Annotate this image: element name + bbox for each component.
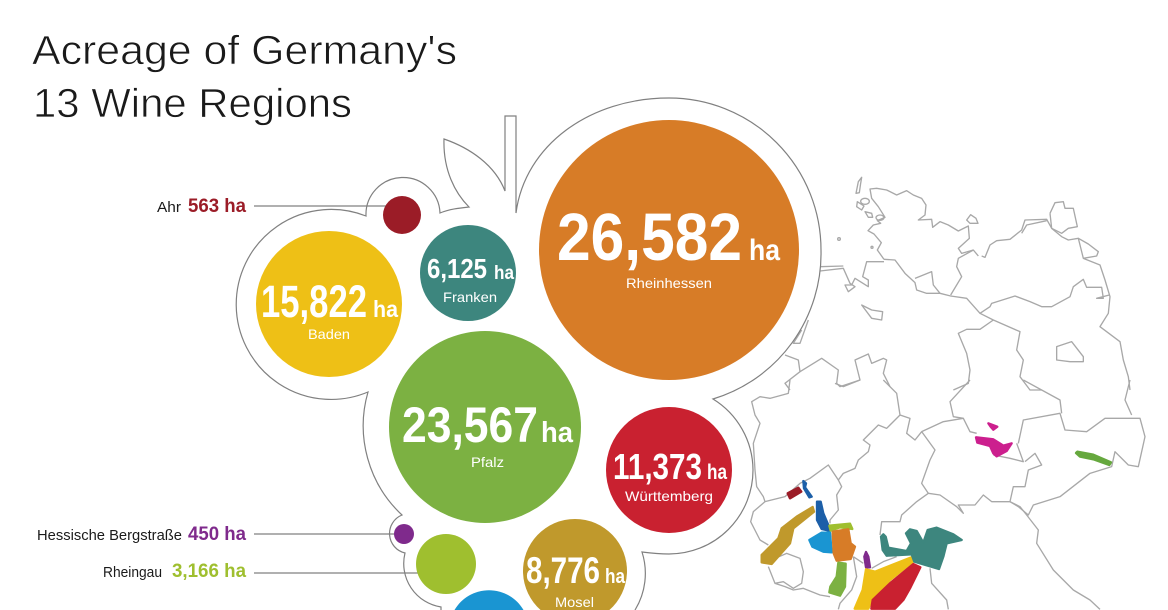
bubble: Rheinhessen: 26,582 — [557, 200, 742, 275]
bubble: Mosel: 8,776 — [526, 550, 600, 591]
map region: Rheingau — [829, 524, 852, 531]
bubble: Rheinhessen — [539, 120, 799, 380]
bubble: Wuerttemberg: 11,373 — [613, 446, 702, 487]
bubble: Mosel: Mosel — [555, 594, 594, 610]
bubble: Pfalz: Pfalz — [471, 454, 504, 470]
bubble: Mosel — [523, 519, 627, 610]
bubble: Wuerttemberg: ha — [707, 461, 727, 484]
callout: Ahr: 563 ha — [188, 196, 246, 217]
map region: Sachsen — [1076, 452, 1111, 465]
callout: Ahr — [157, 196, 390, 217]
callout: Hessische Bergstrasse: Hessische Bergstraße — [37, 527, 182, 544]
bubble: Wuerttemberg — [606, 407, 732, 533]
bubble: Nahe — [454, 590, 524, 610]
map region: Ahr — [788, 488, 801, 498]
bubble: Pfalz — [389, 331, 581, 523]
bubble: Baden — [256, 231, 402, 377]
bubble: Franken — [420, 225, 516, 321]
callout: Rheingau — [103, 561, 420, 582]
map: Germany state borders south — [751, 380, 1145, 609]
map region: Saale-Unstrut — [976, 423, 1012, 456]
title: Acreage of Germany's — [32, 27, 457, 73]
callout: Hessische Bergstrasse: 450 ha — [188, 524, 246, 545]
callout: Rheingau: Rheingau — [103, 564, 162, 581]
bubble: Franken: ha — [494, 263, 514, 284]
bubble: Rheinhessen: ha — [749, 234, 780, 267]
map region: Baden — [855, 557, 913, 609]
map region: Franken — [881, 528, 962, 569]
map region: Mosel — [762, 507, 814, 564]
bubble: Rheingau — [416, 534, 476, 594]
map region: Pfalz — [829, 563, 846, 596]
map region: Rheinhessen — [833, 529, 855, 561]
callout: Hessische Bergstrasse — [37, 524, 396, 545]
map region: Mittelrhein — [803, 481, 829, 531]
map: wine region shapes — [762, 423, 1111, 609]
bubble: Wuerttemberg: Württemberg — [625, 488, 713, 504]
map region: Nahe — [809, 533, 832, 552]
bubble: Pfalz: 23,567 — [402, 397, 538, 453]
bubble: Mosel: ha — [605, 566, 626, 588]
bubble: Franken: Franken — [443, 289, 497, 305]
bubble: Rheinhessen: Rheinhessen — [626, 275, 712, 291]
map: Germany state borders north — [785, 177, 1130, 390]
bubble: Pfalz: ha — [541, 417, 574, 449]
grape bunch outline with leaf and stem — [236, 98, 821, 610]
bubble: Franken: 6,125 — [427, 253, 487, 284]
callout: Rheingau: 3,166 ha — [172, 561, 246, 582]
bubble: Baden: ha — [373, 296, 398, 322]
title: 13 Wine Regions — [33, 80, 352, 126]
bubble: Baden: 15,822 — [261, 276, 367, 327]
map region: Wuerttemberg — [871, 564, 920, 609]
bubble: Hessische Bergstrasse — [394, 524, 414, 544]
map region: Hessische Bergstrasse — [864, 552, 870, 567]
bubble: Ahr — [383, 196, 421, 234]
bubble: Baden: Baden — [308, 326, 350, 342]
title — [32, 27, 457, 126]
callout: Ahr: Ahr — [157, 199, 181, 216]
